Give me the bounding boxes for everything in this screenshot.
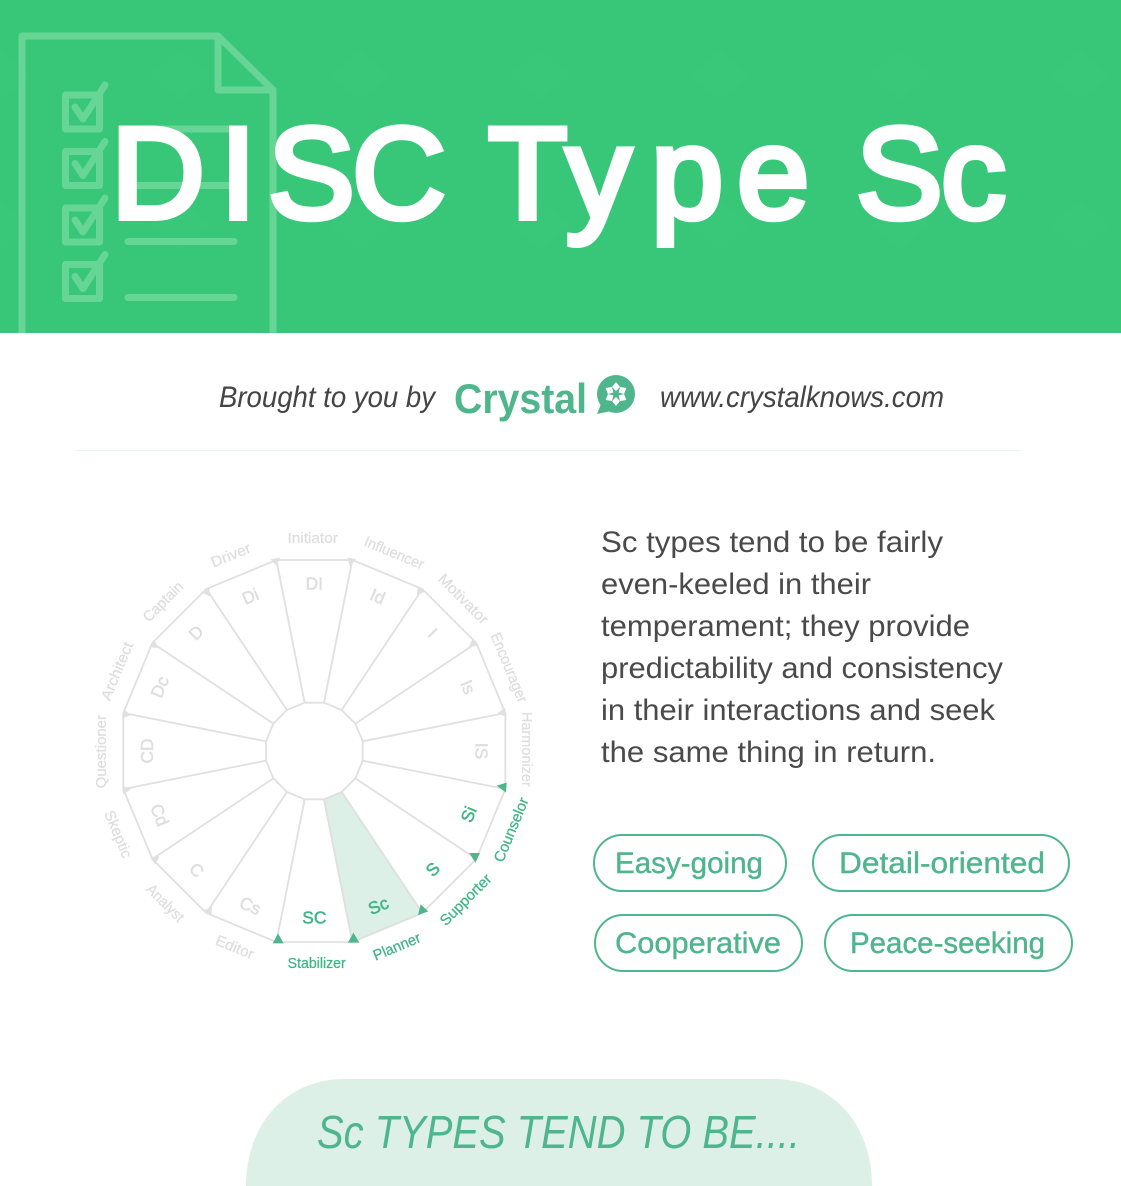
description paragraph: predictability and consistency [601, 652, 1003, 685]
trait pill: Easy-going [594, 835, 786, 891]
segment role labels: Captain [140, 578, 187, 626]
description paragraph: Sc types tend to be fairly [601, 526, 943, 559]
segment role labels: Editor [213, 932, 256, 963]
segment codes: Di [239, 584, 262, 609]
segment codes: CD [137, 738, 157, 764]
segment role labels: Driver [208, 540, 253, 571]
segment codes: IS [472, 743, 492, 759]
highlighted segment: Sc [324, 792, 422, 942]
DISC wheel chart [93, 530, 535, 972]
vertex markers [122, 557, 507, 916]
description paragraph: even-keeled in their [601, 568, 871, 601]
segment codes: Is [456, 677, 480, 697]
segment role labels: Initiator [287, 530, 338, 547]
segment role labels: Architect [98, 639, 137, 703]
segment codes: Cs [237, 892, 264, 919]
segment codes: Sc [365, 892, 392, 919]
trait pill: Cooperative: Cooperative [615, 927, 781, 960]
segment codes: Id [367, 584, 388, 608]
segment role labels [93, 530, 535, 972]
icon: checklist document [22, 36, 273, 333]
segment role labels: Stabilizer [288, 955, 346, 972]
description paragraph: temperament; they provide [601, 610, 970, 643]
attribution row [219, 375, 944, 422]
section heading tab [246, 1079, 872, 1186]
segment codes: Dc [146, 673, 173, 701]
active vertex markers [273, 783, 507, 943]
segment role labels: Motivator [434, 571, 492, 628]
website url: www.crystalknows.com [660, 381, 944, 414]
trait pill: Easy-going: Easy-going [615, 847, 763, 880]
title: DISC Type Sc [0, 100, 1006, 246]
segment role labels: Skeptic [100, 808, 135, 861]
segment codes: DI [306, 574, 323, 594]
segment codes: D [185, 621, 207, 644]
segment role labels: Harmonizer [518, 712, 535, 787]
segment role labels: Analyst [142, 881, 188, 926]
segment codes: I [424, 624, 441, 641]
section heading tab: Sc TYPES TEND TO BE.... [317, 1106, 800, 1158]
segment codes: C [185, 859, 208, 881]
segment codes [137, 574, 492, 928]
brought to you by: Brought to you by [219, 381, 437, 414]
trait pill: Detail-oriented [813, 835, 1069, 891]
trait pill: Detail-oriented: Detail-oriented [839, 847, 1045, 880]
segment codes: Cd [146, 801, 173, 829]
segment role labels: Counselor [491, 795, 533, 865]
icon: Crystal chat bubble flower [597, 375, 635, 414]
segment role labels: Supporter [437, 871, 495, 929]
header banner [0, 0, 1121, 333]
segment codes: Si [456, 803, 481, 825]
description paragraph [601, 526, 1003, 769]
segment role labels: Planner [371, 930, 423, 964]
trait pill: Peace-seeking [825, 915, 1072, 971]
trait pill: Peace-seeking: Peace-seeking [850, 927, 1045, 960]
segment role labels: Influencer [361, 533, 427, 573]
segment codes: S [422, 858, 444, 880]
segment role labels: Questioner [93, 715, 110, 788]
description paragraph: the same thing in return. [601, 736, 936, 769]
trait pill: Cooperative [595, 915, 802, 971]
Crystal logo wordmark: Crystal [454, 375, 587, 422]
segment role labels: Encourager [487, 630, 531, 705]
description paragraph: in their interactions and seek [601, 694, 996, 727]
segment codes: SC [302, 908, 326, 928]
